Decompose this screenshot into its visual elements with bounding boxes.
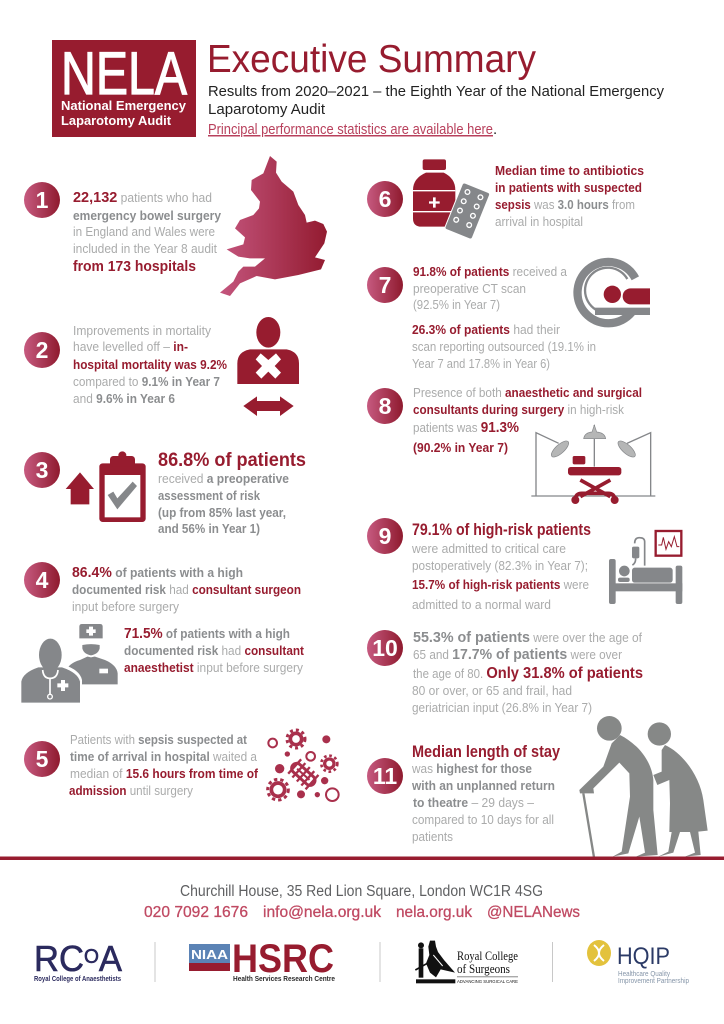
number badge 8 bbox=[367, 388, 403, 424]
text: CT scan: 91.8% of patients received a bbox=[413, 265, 567, 279]
footer contact details bbox=[144, 904, 580, 921]
text: patients included bbox=[73, 189, 221, 275]
text: risk assessment: and 56% in Year 1) bbox=[158, 522, 260, 536]
text: antibiotics: in patients with suspected bbox=[495, 181, 642, 195]
text: risk assessment bbox=[158, 450, 306, 536]
number badge 6 bbox=[367, 181, 403, 217]
number badge 10: 10 bbox=[372, 635, 398, 661]
text: scan outsourcing bbox=[412, 323, 596, 371]
number badge 7: 7 bbox=[379, 272, 391, 298]
number badge 9 bbox=[367, 518, 403, 554]
number badge 1 bbox=[24, 182, 60, 218]
text: scan outsourcing: Year 7 and 17.8% in Year 6) bbox=[412, 357, 550, 371]
icon: operating theatre bbox=[531, 425, 655, 504]
text: patients included: included in the Year 8 audit bbox=[73, 242, 218, 256]
text: mortality: have levelled off – in- bbox=[73, 340, 188, 354]
text: consultant surgeon bbox=[72, 565, 301, 614]
text: sepsis wait: admission until surgery bbox=[69, 784, 194, 798]
text: critical care: 15.7% of high-risk patients were bbox=[412, 578, 589, 592]
logo: NIAA and HSRC bbox=[189, 937, 335, 983]
panel: item 8 bbox=[367, 386, 655, 504]
NELA logo: Laparotomy Audit bbox=[61, 113, 172, 128]
panel: item 5 bbox=[24, 730, 339, 801]
text: consultant surgeon: documented risk had consultant surgeon bbox=[72, 583, 301, 597]
NELA logo: National Emergency bbox=[61, 98, 187, 113]
text: CT scan bbox=[413, 265, 567, 312]
footer contact details: 020 7092 1676 bbox=[144, 904, 248, 921]
text: sepsis wait bbox=[69, 733, 259, 798]
text: consultants during surgery: Presence of both anaesthetic and surgical bbox=[413, 386, 642, 400]
logo: Royal College of Anaesthetists: A bbox=[99, 938, 122, 979]
text: antibiotics: arrival in hospital bbox=[495, 215, 583, 229]
text: older patients: 55.3% of patients were over the age of bbox=[413, 629, 642, 646]
logo: HQIP: Improvement Partnership bbox=[618, 978, 689, 985]
text: risk assessment: received a preoperative bbox=[158, 472, 289, 486]
text: consultants during surgery: (90.2% in Year 7) bbox=[413, 441, 508, 455]
text: sepsis wait: Patients with sepsis suspected at bbox=[70, 733, 248, 747]
text: older patients bbox=[412, 629, 643, 715]
footer contact details: @NELANews bbox=[487, 904, 580, 921]
panel: item 6 bbox=[367, 159, 644, 240]
number badge 6: 6 bbox=[379, 186, 391, 212]
text: antibiotics: Median time to antibiotics bbox=[495, 164, 644, 178]
text: critical care bbox=[411, 520, 591, 612]
text: risk assessment: 86.8% of patients bbox=[158, 450, 306, 471]
header bbox=[52, 38, 664, 138]
footer divider bbox=[0, 856, 724, 860]
text: consultant surgeon: input before surgery bbox=[72, 600, 180, 614]
text: consultant anaesthetist bbox=[124, 626, 305, 675]
logo: Royal College of Surgeons bbox=[415, 941, 518, 984]
text: consultant anaesthetist: anaesthetist input before surgery bbox=[124, 661, 304, 675]
text: mortality: Improvements in mortality bbox=[73, 324, 212, 338]
text: older patients: geriatrician input (26.8% in Year 7) bbox=[412, 701, 592, 715]
text: antibiotics: sepsis was 3.0 hours from bbox=[495, 198, 635, 212]
number badge 4: 4 bbox=[36, 567, 49, 593]
NELA logo bbox=[52, 40, 196, 137]
number badge 11: 11 bbox=[373, 763, 397, 789]
icon: patient with cross and level arrow bbox=[237, 317, 299, 416]
number badge 1: 1 bbox=[36, 187, 49, 213]
text: length of stay: patients bbox=[412, 830, 453, 844]
text: older patients: 65 and 17.7% of patients were over bbox=[413, 646, 622, 663]
text: consultant anaesthetist: documented risk had consultant bbox=[124, 644, 305, 658]
text: critical care: were admitted to critical care bbox=[411, 542, 566, 556]
number badge 4 bbox=[24, 562, 60, 598]
icon: hospital bed and monitor bbox=[609, 531, 682, 604]
number badge 8: 8 bbox=[379, 393, 392, 419]
panel: item 11 bbox=[367, 716, 708, 857]
number badge 3 bbox=[24, 452, 60, 488]
text: consultants during surgery: consultants during surgery in high-risk bbox=[413, 403, 625, 417]
number badge 9: 9 bbox=[379, 523, 391, 549]
number badge 2: 2 bbox=[36, 337, 48, 363]
panel: item 3 bbox=[24, 450, 306, 536]
text: scan outsourcing: 26.3% of patients had their bbox=[412, 323, 560, 337]
number badge 5 bbox=[24, 741, 60, 777]
text: length of stay bbox=[411, 742, 560, 844]
icon: bacteria and viruses bbox=[268, 730, 339, 801]
text: CT scan: preoperative CT scan bbox=[413, 282, 526, 296]
footer contact details: nela.org.uk bbox=[396, 904, 473, 921]
panel: item 7 bbox=[367, 262, 650, 371]
number badge 5: 5 bbox=[36, 746, 49, 772]
text: mortality: compared to 9.1% in Year 7 bbox=[73, 375, 220, 389]
logo: NIAA and HSRC: HSRC bbox=[232, 937, 334, 981]
text: length of stay: with an unplanned return bbox=[411, 779, 555, 793]
number badge 2 bbox=[24, 332, 60, 368]
number badge 7 bbox=[367, 267, 403, 303]
logo: NIAA and HSRC: NIAA bbox=[191, 947, 229, 962]
logo: Royal College of Anaesthetists: O bbox=[84, 946, 99, 968]
text: scan outsourcing: scan reporting outsourced (19.1% in bbox=[412, 340, 596, 354]
number badge 3: 3 bbox=[36, 457, 48, 483]
number badge 11 bbox=[367, 758, 403, 794]
logo: Royal College of Anaesthetists: RC bbox=[34, 938, 86, 979]
text: length of stay: to theatre – 29 days – bbox=[413, 796, 534, 810]
text: mortality: hospital mortality was 9.2% bbox=[73, 358, 227, 372]
text: patients included: 22,132 patients who had bbox=[73, 189, 212, 206]
icon: doctors bbox=[19, 624, 118, 704]
subtitle bbox=[208, 83, 664, 118]
text: critical care: 79.1% of high-risk patients bbox=[412, 520, 591, 539]
text: mortality bbox=[73, 324, 227, 406]
text: consultants during surgery: patients was 91.3% bbox=[413, 420, 519, 436]
icon: CT scanner bbox=[578, 262, 650, 323]
logo: HQIP bbox=[587, 940, 689, 985]
text: sepsis wait: time of arrival in hospital waited a bbox=[70, 750, 257, 764]
NELA logo: NELA bbox=[61, 40, 187, 107]
text: sepsis wait: median of 15.6 hours from time of bbox=[70, 767, 259, 781]
text: risk assessment: (up from 85% last year, bbox=[158, 506, 286, 520]
number badge 10 bbox=[367, 630, 403, 666]
logo: HQIP: Healthcare Quality bbox=[618, 971, 670, 978]
footer address: Churchill House, 35 Red Lion Square, London WC1R 4SG bbox=[180, 883, 543, 900]
subtitle: Results from 2020–2021 – the Eighth Year of the National Emergency bbox=[208, 83, 664, 100]
icon: elderly couple with cane bbox=[579, 716, 708, 857]
link to statistics: Principal performance statistics are available here bbox=[208, 121, 493, 138]
footer contact details: info@nela.org.uk bbox=[263, 904, 382, 921]
panel: item 1 bbox=[24, 156, 327, 296]
logo: NIAA and HSRC: Health Services Research Centre bbox=[233, 974, 335, 983]
text: consultants during surgery bbox=[413, 386, 642, 455]
panel: item 2 bbox=[24, 317, 299, 416]
text: consultant anaesthetist: 71.5% of patients with a high bbox=[124, 626, 290, 642]
logo: Royal College of Anaesthetists: Royal College of Anaesthetists bbox=[34, 974, 121, 983]
logo: Royal College of Surgeons: Royal College bbox=[457, 949, 518, 963]
text: risk assessment: assessment of risk bbox=[158, 489, 260, 503]
icon: up arrow and clipboard bbox=[66, 451, 146, 522]
text: length of stay: Median length of stay bbox=[412, 742, 560, 761]
text: mortality: and 9.6% in Year 6 bbox=[73, 392, 175, 406]
map: England and Wales bbox=[220, 156, 327, 296]
logo: Royal College of Surgeons: of Surgeons bbox=[457, 962, 510, 976]
logo: Royal College of Anaesthetists bbox=[34, 938, 122, 983]
logo: Royal College of Surgeons: ADVANCING SURGICAL CARE bbox=[457, 979, 518, 984]
text: critical care: admitted to a normal ward bbox=[412, 598, 551, 612]
panel: item 10 bbox=[367, 629, 643, 715]
icon: medicine bottle and pills bbox=[413, 159, 490, 240]
text: length of stay: compared to 10 days for all bbox=[412, 813, 554, 827]
panel: item 9 bbox=[367, 518, 682, 612]
text: patients included: in England and Wales were bbox=[73, 225, 215, 239]
logo: HQIP: HQIP bbox=[617, 943, 670, 970]
text: patients included: emergency bowel surgery bbox=[73, 209, 221, 223]
text: consultant surgeon: 86.4% of patients with a high bbox=[72, 565, 243, 581]
text: CT scan: (92.5% in Year 7) bbox=[413, 298, 500, 312]
title: Executive Summary bbox=[207, 38, 536, 81]
panel: item 4 bbox=[19, 562, 305, 704]
text: length of stay: was highest for those bbox=[411, 762, 532, 776]
text: older patients: 80 or over, or 65 and frail, had bbox=[412, 684, 572, 698]
text: patients included: from 173 hospitals bbox=[73, 258, 196, 275]
link to statistics: . bbox=[493, 121, 497, 138]
text: antibiotics bbox=[495, 164, 644, 229]
text: critical care: postoperatively (82.3% in Year 7); bbox=[412, 559, 588, 573]
text: older patients: the age of 80. Only 31.8% of patients bbox=[413, 665, 643, 682]
subtitle: Laparotomy Audit bbox=[208, 101, 326, 118]
